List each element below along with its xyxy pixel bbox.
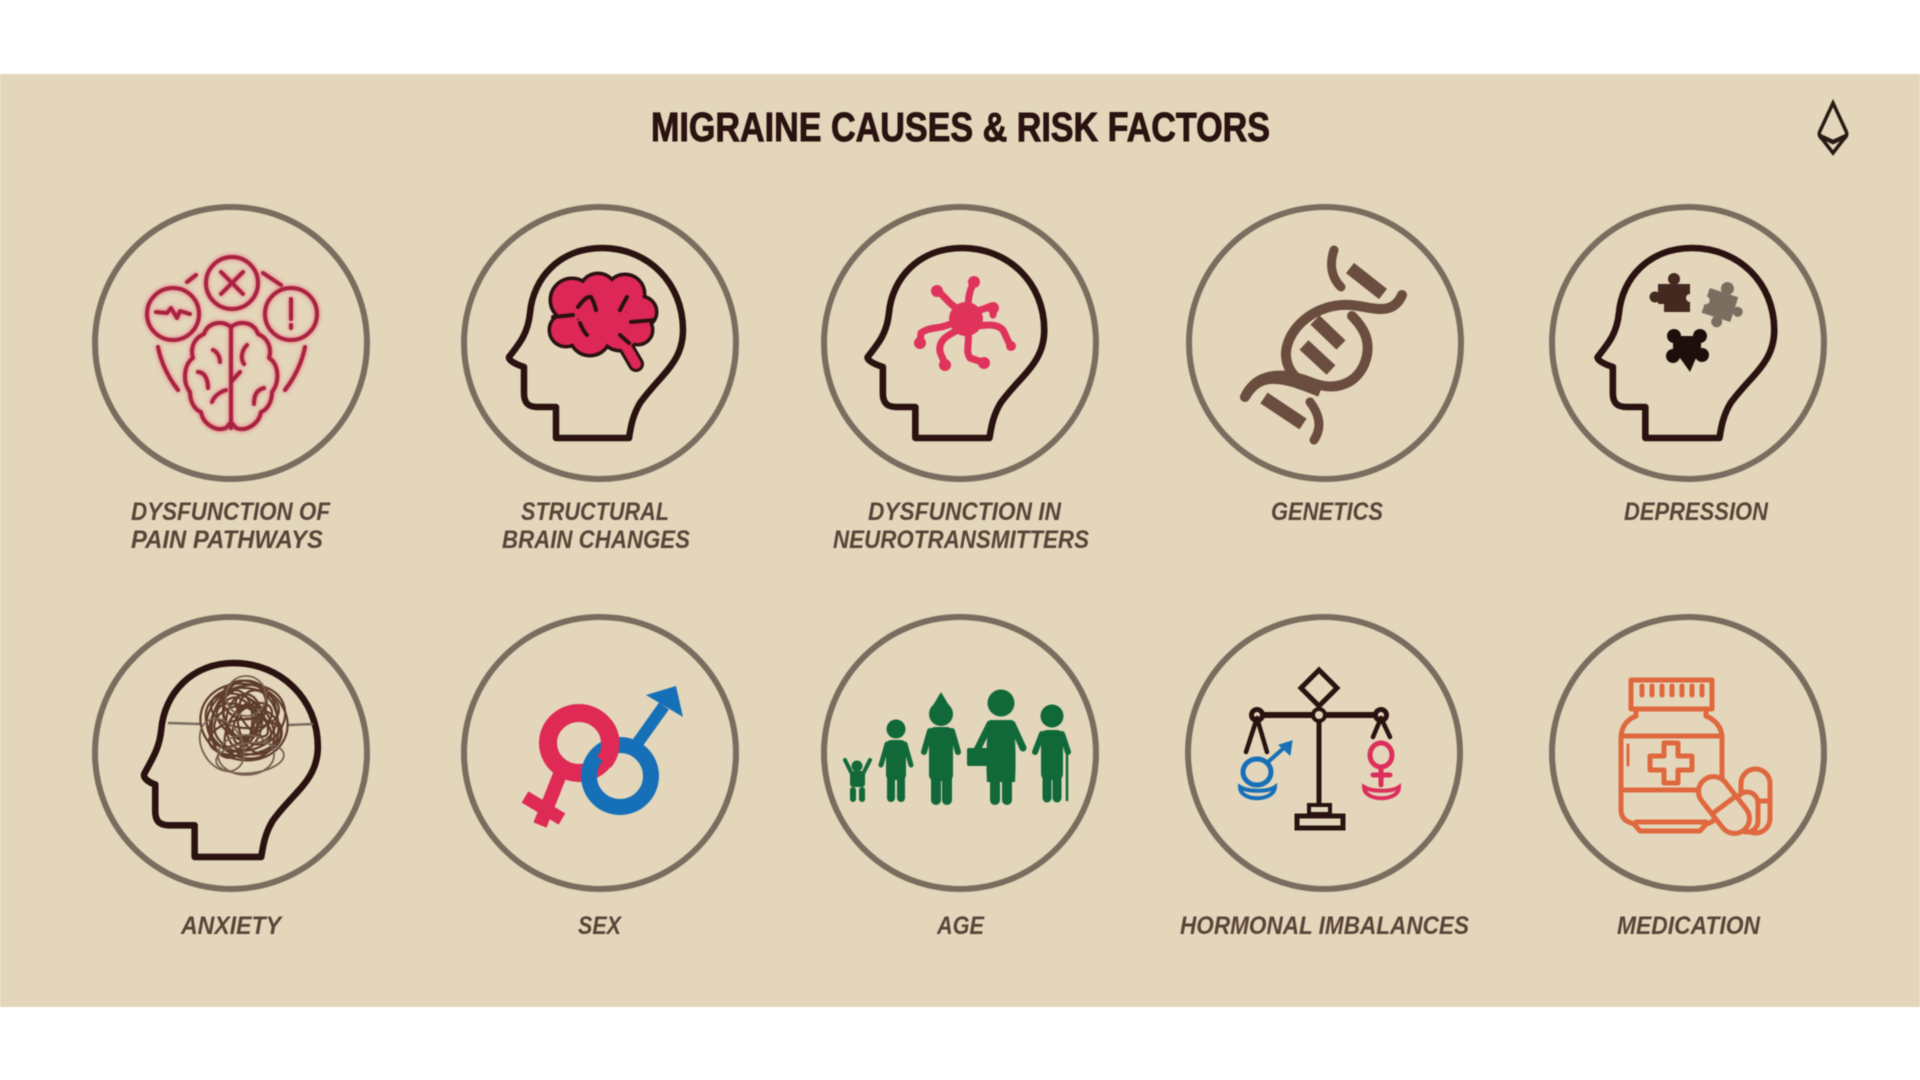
icon: head with brain xyxy=(509,248,683,438)
head outline xyxy=(1598,248,1774,438)
puzzle piece: dark brown xyxy=(1650,273,1694,313)
label: ANXIETY xyxy=(180,912,283,940)
label: AGE xyxy=(936,912,985,940)
panel: sex xyxy=(464,617,736,940)
puzzle piece: black xyxy=(1666,329,1709,372)
label xyxy=(833,498,1089,554)
head outline xyxy=(144,663,318,857)
panel: structural brain changes xyxy=(464,207,736,554)
panel: hormonal imbalances xyxy=(1180,617,1469,940)
ring xyxy=(824,207,1096,479)
cross xyxy=(1650,743,1692,783)
icon: logo xyxy=(1819,103,1847,153)
ring xyxy=(1188,617,1460,889)
elder with cane xyxy=(1035,704,1068,800)
head outline xyxy=(509,248,683,438)
child xyxy=(845,760,870,799)
label xyxy=(502,498,690,554)
ring xyxy=(824,617,1096,889)
icon: interlocked gender symbols xyxy=(525,686,683,825)
pink overlap xyxy=(604,725,611,762)
line across head xyxy=(168,723,313,725)
puzzle piece: grey xyxy=(1695,276,1750,334)
ring xyxy=(95,207,367,479)
ring xyxy=(1189,207,1461,479)
label: BRAIN CHANGES xyxy=(502,526,690,554)
icon: balance scale xyxy=(1240,670,1399,828)
scribble xyxy=(192,673,296,772)
icon: dna helix xyxy=(1245,250,1402,440)
label: PAIN PATHWAYS xyxy=(131,526,323,554)
ring xyxy=(95,617,367,889)
bottle body xyxy=(1621,709,1722,831)
woman xyxy=(924,692,958,800)
panel: dysfunction in neurotransmitters xyxy=(824,207,1096,554)
female symbol xyxy=(525,713,610,825)
label: HORMONAL IMBALANCES xyxy=(1180,912,1469,940)
bottle cap xyxy=(1631,680,1712,709)
label xyxy=(131,498,331,554)
title: MIGRAINE CAUSES & RISK FACTORS xyxy=(651,104,1270,150)
male symbol on pan xyxy=(1240,741,1292,798)
ring xyxy=(1552,207,1824,479)
label: NEUROTRANSMITTERS xyxy=(833,526,1089,554)
icon: head with puzzle pieces xyxy=(1598,248,1774,438)
panel: anxiety xyxy=(95,617,367,940)
label: MEDICATION xyxy=(1617,912,1761,940)
neuron xyxy=(914,276,1016,371)
brain xyxy=(551,275,655,364)
male symbol xyxy=(589,686,683,807)
panel: age xyxy=(824,617,1096,940)
icon: head with neuron xyxy=(868,248,1044,438)
panel: depression xyxy=(1552,207,1824,526)
man with bag xyxy=(967,690,1023,800)
icon: head with tangled thoughts xyxy=(144,663,318,857)
capsules xyxy=(1692,769,1770,839)
icon: people by age xyxy=(845,690,1068,800)
icon: pill bottle and capsules xyxy=(1621,680,1770,839)
scale frame xyxy=(1246,670,1390,828)
panel: dysfunction of pain pathways xyxy=(95,207,367,554)
head outline xyxy=(868,248,1044,438)
label: GENETICS xyxy=(1271,498,1383,526)
ring xyxy=(464,207,736,479)
panel: genetics xyxy=(1189,207,1461,526)
label: SEX xyxy=(578,912,622,940)
icon: brain with warning signs xyxy=(147,257,317,429)
label: STRUCTURAL xyxy=(521,498,669,526)
ring xyxy=(464,617,736,889)
female symbol on pan xyxy=(1364,743,1399,798)
kid xyxy=(881,720,911,798)
label: DYSFUNCTION OF xyxy=(131,498,331,526)
label: DEPRESSION xyxy=(1624,498,1769,526)
ring xyxy=(1552,617,1824,889)
label: DYSFUNCTION IN xyxy=(868,498,1062,526)
panel: medication xyxy=(1552,617,1824,940)
